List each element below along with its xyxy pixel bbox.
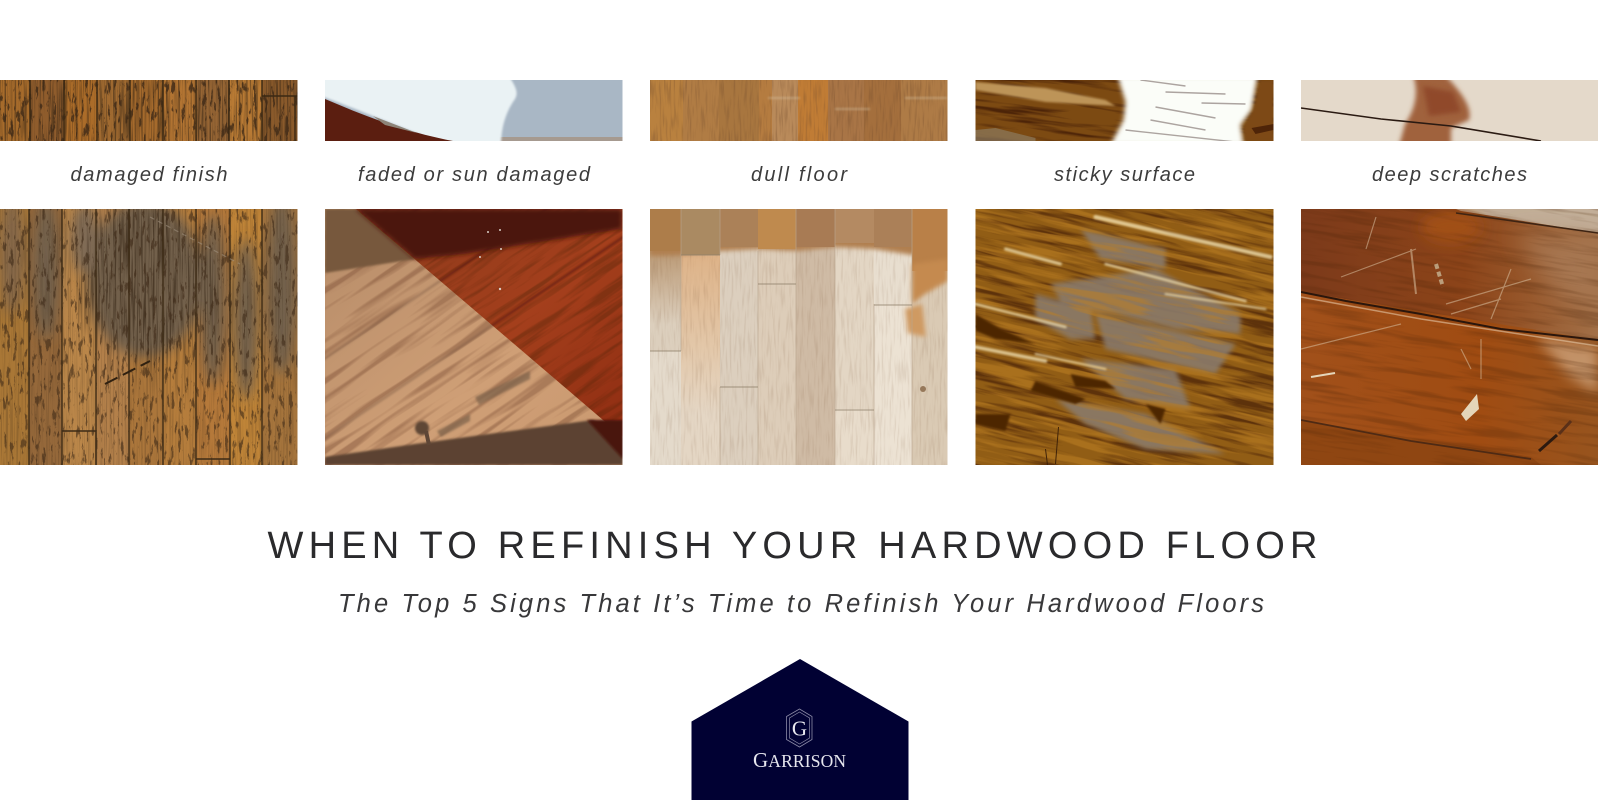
photo: deep scratches, rust planks with scratches	[1301, 209, 1598, 465]
photo: damaged finish, worn vertical planks	[0, 209, 298, 465]
label: faded or sun damaged: faded or sun damaged	[358, 164, 591, 186]
photo: sticky surface, glare strip	[976, 80, 1274, 141]
icon: G emblem	[786, 709, 812, 747]
photo: damaged finish, close-up strip	[0, 80, 298, 141]
house shape	[692, 659, 908, 800]
label: damaged finish: damaged finish	[70, 164, 228, 186]
photo: deep scratches, close-up strip	[1301, 80, 1598, 141]
label: deep scratches: deep scratches	[1372, 164, 1527, 186]
label: sticky surface: sticky surface	[1054, 164, 1195, 186]
icon: G emblem: G	[792, 716, 807, 740]
logo: Garrison house badge	[692, 659, 908, 800]
label: dull floor: dull floor	[751, 164, 848, 186]
photo: faded or sun damaged, rug on floor strip	[325, 80, 622, 141]
title: WHEN TO REFINISH YOUR HARDWOOD FLOOR	[268, 525, 1318, 567]
subtitle: The Top 5 Signs That It’s Time to Refinish Your Hardwood Floors	[338, 590, 1264, 618]
photo: faded or sun damaged, sunlit diagonal floor	[325, 209, 622, 465]
photo: dull floor, close-up strip	[650, 80, 948, 141]
photo: dull floor, partly sanded planks	[650, 209, 948, 465]
photo: sticky surface, peeling glossy finish	[976, 209, 1274, 465]
wordmark: GARRISON	[753, 748, 846, 772]
